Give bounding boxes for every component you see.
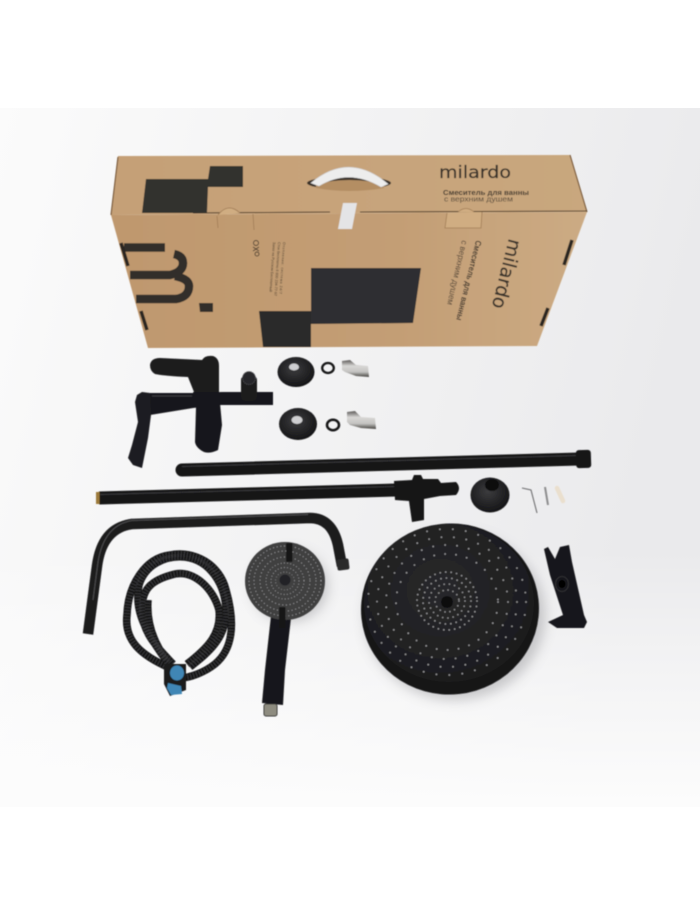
wall bracket: [470, 478, 510, 512]
front product title: Смеситель для ванны: [454, 240, 484, 321]
long riser rod: [182, 450, 591, 470]
shadows: [252, 532, 545, 700]
bath faucet: [128, 356, 273, 468]
product parts: [88, 356, 591, 716]
top dark block: [142, 166, 243, 213]
diverter knob: [241, 376, 257, 401]
hand shower holder: [544, 545, 587, 628]
hose blue clip: [164, 664, 186, 696]
large front block: [311, 268, 421, 324]
hand shower face: [245, 542, 325, 620]
hand shower handle: [262, 616, 291, 705]
hand shower top slot: [286, 543, 292, 562]
faucet body and lower spout: [193, 392, 222, 453]
top brand name: milardo: [439, 163, 511, 182]
small screw: [545, 487, 548, 505]
upper steel adapter: [342, 360, 369, 377]
rain head nozzles: [368, 529, 526, 675]
faucet lever: [150, 356, 219, 392]
hand shower thread: [264, 704, 277, 716]
hand shower bottom slot: [279, 607, 286, 628]
photo background: [0, 108, 700, 807]
small print: Заказ на Русском Бесплатный: [269, 242, 276, 292]
white tape tab: [338, 203, 357, 229]
rain shower head: [353, 515, 547, 703]
rotated m logo: [124, 248, 189, 299]
faucet horizontal pipe: [144, 392, 273, 415]
cardboard box: [111, 155, 587, 348]
small print: Сток бесплатно 8 800 234-77-97: [273, 242, 281, 296]
logo dot: [199, 303, 213, 312]
small print: Отопление: система 24/7: [278, 242, 286, 294]
top product title: Смеситель для ванны: [443, 190, 529, 197]
upper escutcheon: [278, 357, 314, 387]
faucet pipe highlight: [152, 395, 192, 397]
rain head face: [364, 524, 534, 682]
box inner edges: [111, 155, 587, 215]
rain head centre cap: [441, 596, 453, 608]
rod with diverter: [96, 475, 459, 522]
flexible hose: [127, 554, 231, 678]
small print: [269, 242, 286, 296]
upper rubber ring: [322, 363, 334, 373]
lower escutcheon: [279, 408, 317, 440]
white handle: [311, 167, 388, 187]
rain head body: [353, 515, 547, 703]
box front face: [111, 212, 587, 348]
hex key: [522, 488, 537, 513]
front product subtitle: с верхним душем: [445, 240, 470, 306]
wall plug: [557, 488, 563, 501]
front brand name: milardo: [487, 237, 525, 311]
certification marks: [253, 240, 259, 256]
side handle cut-outs: [121, 240, 572, 330]
lower rubber ring: [327, 420, 339, 430]
shower arm: [88, 514, 350, 634]
box top face: [111, 155, 587, 215]
hand shower: [245, 542, 325, 716]
lower front block: [259, 311, 311, 347]
lower steel adapter: [347, 411, 376, 429]
left flap: [217, 208, 254, 230]
faucet side spout: [128, 392, 151, 468]
handle slot: [307, 176, 391, 190]
tee fitting: [394, 475, 459, 522]
top product subtitle: с верхним душем: [444, 196, 513, 204]
right flap: [445, 208, 482, 228]
